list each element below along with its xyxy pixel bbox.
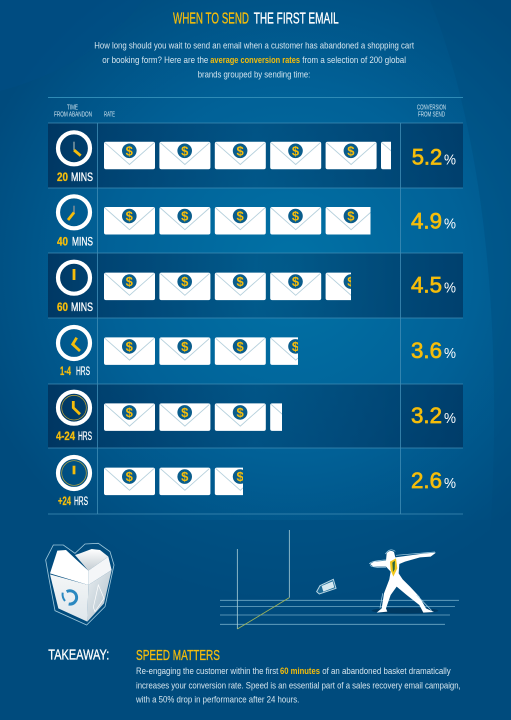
row: 1-4 hrs — [58, 327, 456, 378]
clock: 40 mins — [58, 196, 90, 228]
label: 40 mins: MINS — [72, 234, 93, 248]
intro text: from a selection of 200 global — [302, 55, 406, 65]
table header: RATE — [104, 112, 115, 119]
value: 3.2%: % — [444, 410, 456, 427]
label: 40 mins: 40 — [57, 234, 68, 248]
takeaway text — [135, 666, 461, 705]
table header: FROM SEND — [418, 112, 445, 119]
table header — [48, 98, 463, 119]
value: 4.9%: % — [444, 215, 456, 232]
row: 60 mins — [57, 262, 456, 314]
value: 3.6%: 3.6 — [411, 338, 442, 363]
label: 1-4 hrs: HRS — [76, 364, 90, 378]
bar: envelopes 4.5%: $ — [126, 274, 134, 289]
bar: envelopes 4.9% — [104, 207, 377, 234]
bar: envelopes 5.2%: $ — [236, 143, 244, 158]
value: 5.2%: 5.2 — [412, 144, 442, 169]
bar: envelopes 4.9%: $ — [181, 208, 189, 224]
bar: envelopes 4.9%: $ — [126, 208, 134, 224]
bar: envelopes 3.6% — [104, 337, 321, 365]
bar: envelopes 4.9%: $ — [236, 208, 244, 224]
illustration: track lines and goal — [220, 530, 459, 629]
bar: envelopes 5.2%: $ — [181, 143, 189, 158]
takeaway text: with a 50% drop in performance after 24 hours. — [135, 695, 299, 705]
row: 4-24 hrs — [56, 392, 456, 443]
bar: envelopes 5.2% — [104, 142, 391, 170]
label: 20 mins: 20 — [57, 170, 68, 184]
bar: envelopes 4.5%: $ — [347, 274, 355, 289]
table header: TIME — [67, 104, 78, 111]
bar: envelopes 4.5%: $ — [236, 274, 244, 289]
value: 3.2%: 3.2 — [411, 403, 442, 428]
label: 1-4 hrs: 1-4 — [60, 364, 71, 378]
bar: envelopes 3.6%: $ — [236, 339, 244, 354]
value: 4.5%: 4.5 — [411, 272, 442, 298]
bar: envelopes 4.5%: $ — [292, 274, 300, 289]
value: 3.6% — [411, 338, 456, 363]
clock: 60 mins — [58, 262, 90, 294]
illustration: athlete throwing — [369, 550, 438, 614]
bar: envelopes 2.6%: $ — [181, 469, 189, 484]
value: 3.6%: % — [444, 345, 456, 362]
takeaway text: of an abandoned basket dramatically — [322, 666, 451, 676]
row bands — [48, 123, 463, 514]
bar: envelopes 3.2%: $ — [181, 405, 189, 420]
bar: envelopes 3.2%: $ — [126, 405, 134, 420]
value: 2.6% — [411, 468, 456, 493]
bar: envelopes 3.6%: $ — [181, 339, 189, 354]
clock: 4-24 hrs — [58, 392, 90, 424]
value: 2.6%: % — [444, 475, 456, 492]
clock: 1-4 hrs — [58, 327, 90, 359]
bar: envelopes 5.2%: $ — [347, 143, 355, 158]
label: 60 mins: MINS — [71, 300, 93, 314]
bar: envelopes 3.2%: $ — [236, 405, 244, 420]
label: 4-24 hrs — [56, 429, 92, 443]
label: 20 mins — [57, 170, 93, 184]
bar: envelopes 2.6%: $ — [236, 469, 244, 484]
takeaway heading: TAKEAWAY: — [48, 646, 109, 664]
takeaway text: 60 minutes — [280, 666, 320, 676]
intro text: or booking form? Here are the — [102, 55, 208, 65]
value: 2.6%: 2.6 — [411, 468, 442, 493]
bar: envelopes 4.5%: $ — [181, 274, 189, 289]
label: 1-4 hrs — [60, 364, 90, 378]
bar: envelopes 2.6% — [104, 468, 243, 496]
bar: envelopes 2.6%: $ — [126, 469, 134, 484]
clock: +24 hrs — [58, 457, 90, 489]
value: 4.5% — [411, 272, 456, 298]
takeaway heading — [48, 646, 220, 664]
label: +24 hrs: HRS — [74, 494, 88, 508]
intro text: average conversion rates — [210, 55, 300, 65]
value: 5.2% — [412, 144, 456, 169]
takeaway heading: SPEED MATTERS — [136, 647, 220, 664]
bar: envelopes 4.9%: $ — [292, 208, 300, 224]
bar: envelopes 5.2%: $ — [126, 143, 134, 158]
value: 4.5%: % — [444, 280, 456, 296]
bar: envelopes 4.5% — [104, 273, 377, 300]
intro text — [94, 41, 414, 79]
label: 60 mins: 60 — [57, 300, 68, 314]
takeaway text: Re-engaging the customer within the first — [136, 666, 279, 676]
label: 60 mins — [57, 300, 93, 314]
bar: envelopes 3.6%: $ — [292, 339, 300, 354]
label: 4-24 hrs: 4-24 — [56, 429, 75, 443]
value: 3.2% — [411, 403, 456, 428]
bar: envelopes 3.6%: $ — [126, 339, 134, 354]
icon: takeout box — [46, 543, 114, 625]
intro text: How long should you wait to send an email when a customer has abandoned a shopping cart — [94, 41, 414, 51]
table header: FROM ABANDON — [54, 112, 92, 119]
label: 20 mins: MINS — [71, 170, 93, 184]
label: 4-24 hrs: HRS — [78, 429, 92, 443]
icon: thrown ticket — [317, 579, 336, 594]
label: +24 hrs — [58, 494, 88, 508]
clock: 20 mins — [58, 132, 90, 164]
table header: CONVERSION — [417, 104, 446, 111]
value: 4.9%: 4.9 — [411, 208, 442, 233]
value: 5.2%: % — [444, 151, 456, 168]
row: +24 hrs — [58, 457, 456, 508]
row: 40 mins — [57, 196, 456, 248]
takeaway text: increases your conversion rate. Speed is an essential part of a sales recovery email campaign, — [136, 681, 461, 691]
title: THE FIRST EMAIL — [254, 10, 339, 27]
label: 40 mins — [57, 234, 93, 248]
row: 20 mins — [57, 132, 456, 184]
title: WHEN TO SEND — [173, 10, 249, 27]
label: +24 hrs: +24 — [58, 494, 71, 508]
bar: envelopes 5.2%: $ — [292, 143, 300, 158]
intro text: brands grouped by sending time: — [198, 69, 310, 79]
bar: envelopes 4.9%: $ — [347, 208, 355, 224]
value: 4.9% — [411, 208, 456, 233]
bar: envelopes 3.2% — [104, 403, 282, 431]
